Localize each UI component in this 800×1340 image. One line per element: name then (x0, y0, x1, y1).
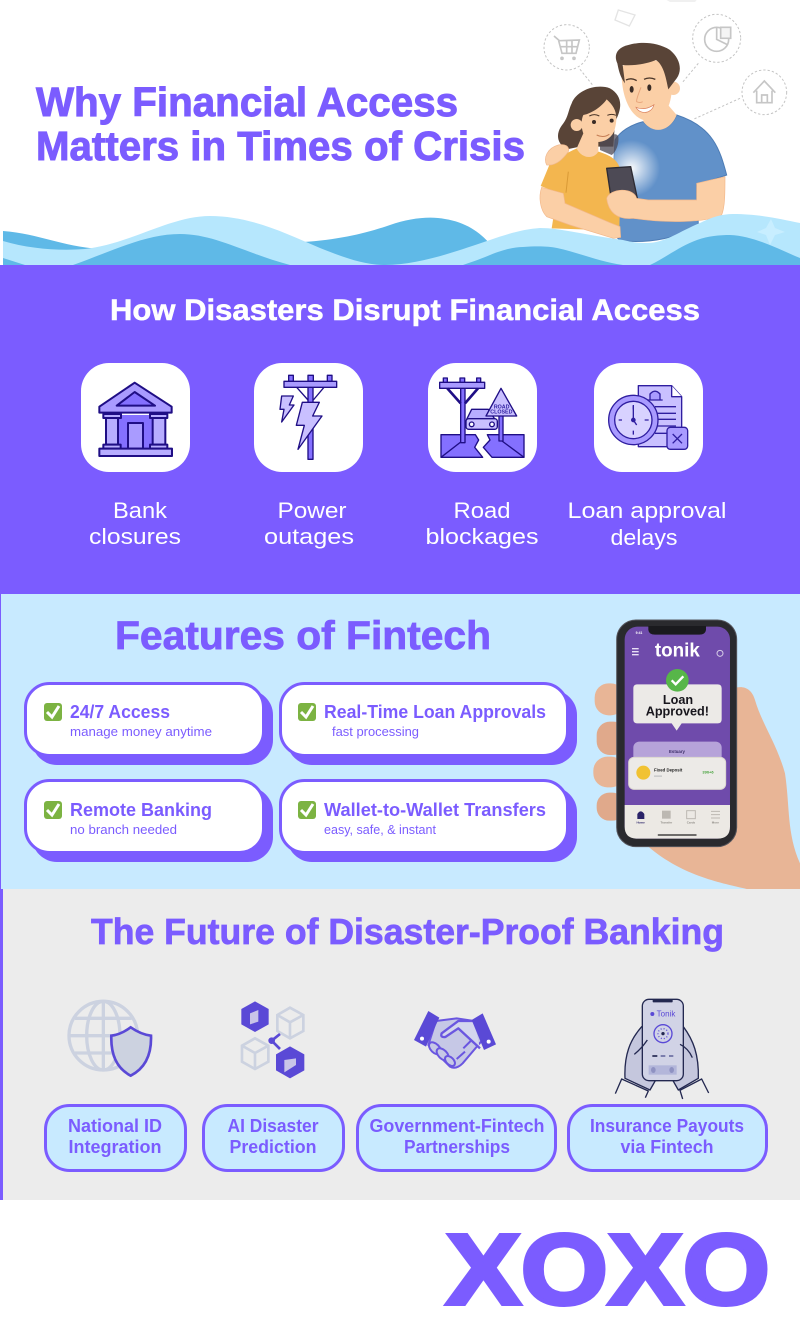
card: remote banking (26, 780, 273, 862)
heading: How Disasters Disrupt Financial Access (110, 294, 700, 327)
label: bank closures: Bank (113, 498, 168, 523)
icon: hexagon network (241, 1001, 304, 1078)
illustration: hand holding phone with loan approved screen (593, 620, 800, 889)
pill: national id integration: National ID (68, 1116, 162, 1136)
illustration: hand holding phone with loan approved screen: Estuary (669, 749, 686, 754)
pill: ai disaster prediction (204, 1106, 344, 1170)
title: Matters in Times of Crisis (36, 123, 525, 169)
card: 24/7 access: 24/7 Access (70, 702, 170, 722)
pill: ai disaster prediction: AI Disaster (228, 1116, 318, 1136)
icon: bank (81, 363, 190, 472)
panel: how disasters disrupt financial access (0, 265, 800, 594)
panel: future of disaster-proof banking (0, 889, 800, 1200)
heading: The Future of Disaster-Proof Banking (91, 911, 724, 952)
label: bank closures: closures (89, 524, 181, 549)
card: remote banking: Remote Banking (70, 800, 212, 820)
label: road blockages: Road (454, 498, 510, 523)
man's shirt (610, 115, 727, 242)
illustration: hand holding phone with loan approved screen: More (712, 821, 719, 825)
icon: globe and shield (69, 1001, 151, 1076)
pill: national id integration: Integration (68, 1137, 162, 1157)
illustration: hand holding phone with loan approved screen: Cards (687, 821, 696, 825)
icon: power pole (254, 363, 363, 472)
illustration: hand holding phone with loan approved screen: Home (637, 821, 645, 825)
illustration: hand holding phone with loan approved screen: Fixed Deposit (654, 768, 683, 773)
card: real-time loan approvals: fast processing (332, 724, 419, 739)
phone and man's arm (607, 167, 637, 198)
illustration: hand holding phone with loan approved screen: tonik (655, 641, 700, 662)
icon: hands holding tonik phone (615, 999, 709, 1099)
pill: insurance payouts via fintech (568, 1106, 766, 1170)
icon: hands holding tonik phone: Tonik (657, 1010, 675, 1019)
pill: national id integration (46, 1106, 186, 1170)
girl (558, 87, 620, 149)
card: real-time loan approvals: Real-Time Loan Approvals (324, 702, 546, 722)
icon: handshake (414, 1011, 496, 1068)
label: loan approval delays (568, 498, 726, 550)
pill: government-fintech partnerships (358, 1106, 556, 1170)
label: road blockages: blockages (426, 524, 538, 549)
card: 24/7 access (26, 684, 273, 765)
label: bank closures (89, 498, 181, 549)
pill: insurance payouts via fintech: via Fintech (620, 1137, 714, 1157)
man's head (643, 103, 677, 130)
logo: XOXO: XOXO (446, 1214, 770, 1326)
label: power outages: Power (278, 498, 346, 523)
illustration: hand holding phone with loan approved screen: Transfer (660, 821, 673, 825)
illustration: hand holding phone with loan approved screen: 390+6 (702, 770, 714, 775)
decorative waves (3, 214, 800, 265)
icon: road blockage (428, 363, 537, 472)
panel: features of fintech (0, 594, 800, 889)
label: loan approval delays: delays (610, 525, 678, 550)
card: wallet-to-wallet transfers: easy, safe, & instant (324, 822, 436, 837)
pill: insurance payouts via fintech: Insurance Payouts (590, 1116, 744, 1136)
illustration: parent and child with phone (540, 0, 787, 242)
card: real-time loan approvals (280, 684, 577, 765)
card: wallet-to-wallet transfers: Wallet-to-Wallet Transfers (324, 800, 546, 820)
pill: ai disaster prediction: Prediction (230, 1137, 316, 1157)
icon: road blockage: CLOSED (490, 410, 513, 416)
heading: Features of Fintech (115, 614, 491, 658)
pill: government-fintech partnerships: Government-Fintech (370, 1116, 544, 1136)
card: remote banking: no branch needed (70, 822, 177, 837)
pill: government-fintech partnerships: Partnerships (404, 1137, 510, 1157)
title (36, 79, 525, 169)
label: power outages (264, 498, 354, 549)
title: Why Financial Access (36, 79, 458, 125)
icon: loan approval delay (594, 363, 703, 472)
card: wallet-to-wallet transfers (280, 780, 577, 862)
label: loan approval delays: Loan approval (568, 498, 726, 523)
card: 24/7 access: manage money anytime (70, 724, 212, 739)
illustration: hand holding phone with loan approved screen: Approved! (646, 705, 709, 719)
label: power outages: outages (264, 524, 354, 549)
illustration: hand holding phone with loan approved screen: Loan (663, 693, 693, 707)
illustration: hand holding phone with loan approved screen: 9:41 (636, 631, 642, 635)
label: road blockages (426, 498, 538, 549)
icon: road blockage: ROAD (494, 405, 510, 411)
panel: hero header (0, 0, 800, 265)
